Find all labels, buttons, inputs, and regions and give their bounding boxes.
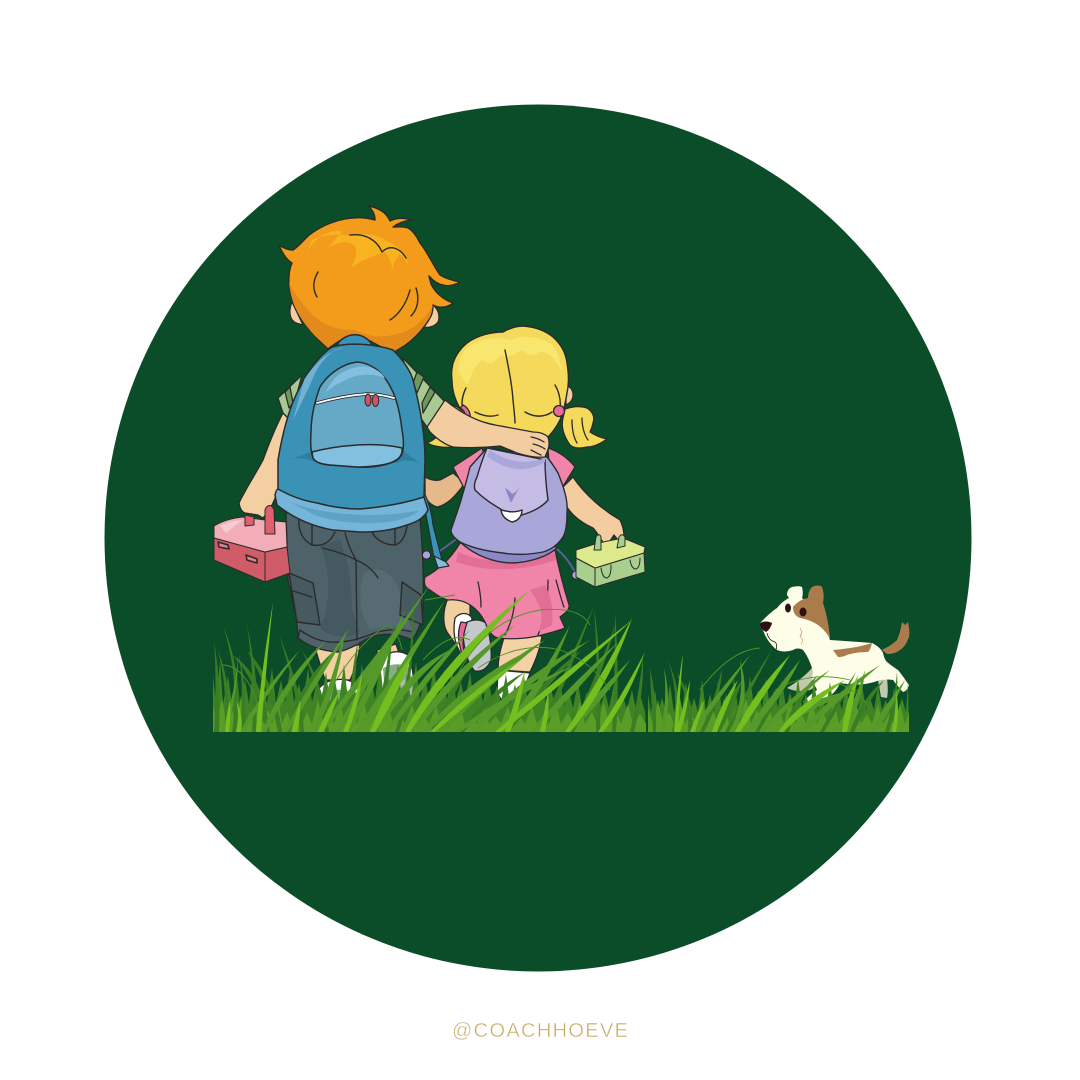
dog face details [760,622,772,632]
boy backpack [275,335,428,532]
girl right ear [566,385,573,405]
grass dark slender blades [214,590,897,732]
dog body [760,586,909,702]
girl green lunchbox [576,535,645,587]
grass foreground [213,585,909,732]
girl hair [452,326,568,440]
illustration: boy walking [214,206,549,712]
girl skirt [424,543,569,639]
boy left arm [239,413,290,518]
girl right arm [562,477,624,547]
girl backpack [451,448,567,563]
backpack zipper [317,394,394,406]
grass mid green diagonal blades [222,585,905,732]
illustration: running dog [760,586,909,702]
girl pink shirt sleeves [453,448,575,490]
boy head ears [290,302,439,327]
boy right arm around girl [427,400,549,457]
dark green background circle [104,104,972,972]
boy legs and shoes [313,644,415,712]
illustration: girl walking [424,326,645,716]
boy orange hair [279,206,460,352]
girl hair ties and right pigtail [460,405,607,448]
footer handle: @COACHHOEVE [452,1020,628,1042]
grass dark base tufts [213,660,909,732]
boy backpack strap [422,492,449,568]
girl left pigtail [427,405,470,447]
dog tail [882,622,909,654]
dog brown patches [793,586,872,657]
boy shorts [286,513,423,652]
girl back leg and shoe [444,598,491,671]
dog back shaded leg [878,678,888,698]
boy pink lunchbox [214,506,290,582]
grass bright lime blades [225,590,898,732]
boy shirt sleeves [278,358,446,427]
girl left arm and sleeve [425,473,465,507]
girl backpack strings [440,540,580,579]
grass thin curved strands [222,595,868,705]
girl front leg, sock and shoe [492,634,542,716]
grass lighter base tufts [213,696,909,732]
dog front shaded leg [787,668,830,691]
